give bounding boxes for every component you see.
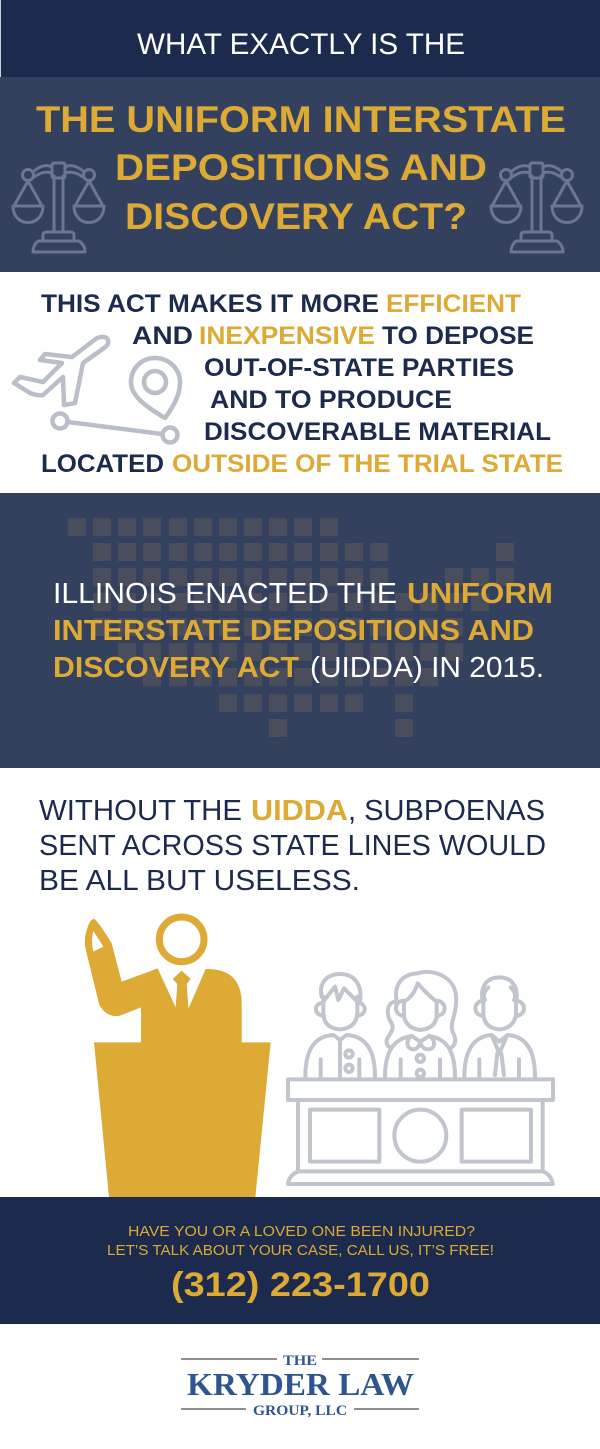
text: act description: OUTSIDE OF THE TRIAL STATE xyxy=(172,450,563,478)
text: illinois enacted statement: INTERSTATE DEPOSITIONS AND xyxy=(53,615,534,647)
title: THE UNIFORM INTERSTATE xyxy=(36,99,566,140)
text: illinois enacted statement: DISCOVERY ACT xyxy=(53,652,299,684)
text: act description: AND xyxy=(132,322,193,350)
logo: the kryder law group: GROUP, LLC xyxy=(253,1403,347,1419)
text: without the uidda: , SUBPOENAS xyxy=(348,795,545,827)
juror: middle woman xyxy=(385,972,456,1077)
text: act description: EFFICIENT xyxy=(386,290,521,318)
text: without the uidda: SENT ACROSS STATE LINES WOULD xyxy=(39,830,546,862)
map: pixel map of the United States xyxy=(68,518,514,737)
icon: airplane and map pin route xyxy=(14,337,180,442)
icon: right scales of justice xyxy=(491,163,582,252)
text: illinois enacted statement: ILLINOIS ENACTED THE xyxy=(53,578,397,610)
text: without the uidda: BE ALL BUT USELESS. xyxy=(39,865,360,897)
text: act description: THIS ACT MAKES IT MORE xyxy=(41,290,379,318)
panel: call to action footer: LET’S TALK ABOUT YOUR CASE, CALL US, IT’S FREE! xyxy=(107,1243,494,1259)
jury bench xyxy=(288,1079,553,1184)
panel: act explanation xyxy=(0,272,600,493)
text: phone number: (312) 223-1700 xyxy=(171,1266,430,1304)
text: without the uidda: UIDDA xyxy=(251,795,348,827)
text: act description: DISCOVERABLE MATERIAL xyxy=(204,418,551,446)
text: act description: OUT-OF-STATE PARTIES xyxy=(204,354,514,382)
text: illinois enacted statement: (UIDDA) IN 2015. xyxy=(310,652,544,684)
panel: top heading band xyxy=(0,0,600,77)
icon: lawyer at podium xyxy=(85,917,271,1197)
text: without the uidda: WITHOUT THE xyxy=(39,795,242,827)
logo: the kryder law group: KRYDER LAW xyxy=(187,1366,414,1402)
title xyxy=(36,99,566,237)
text: call to action: HAVE YOU OR A LOVED ONE BEEN INJURED? xyxy=(128,1224,475,1240)
text: illinois enacted statement xyxy=(53,578,553,684)
text: act description xyxy=(41,290,563,478)
juror: right man xyxy=(464,977,535,1077)
title: DISCOVERY ACT? xyxy=(125,196,467,237)
icon: jury at bench xyxy=(288,972,553,1184)
text: act description: TO DEPOSE xyxy=(382,322,534,350)
text: act description: INEXPENSIVE xyxy=(199,322,375,350)
icon: left scales of justice xyxy=(13,163,104,252)
text: act description: AND TO PRODUCE xyxy=(210,386,452,414)
panel: act title xyxy=(0,77,600,272)
text: act description: LOCATED xyxy=(41,450,164,478)
title: DEPOSITIONS AND xyxy=(115,147,487,188)
juror: left man xyxy=(305,974,375,1077)
logo: the kryder law group: THE xyxy=(283,1353,317,1369)
text: illinois enacted statement: UNIFORM xyxy=(407,578,553,610)
text: without the uidda xyxy=(39,795,546,897)
heading: what exactly is the: WHAT EXACTLY IS THE xyxy=(137,28,465,61)
panel: call to action footer xyxy=(0,1197,600,1324)
logo: the kryder law group xyxy=(181,1353,419,1419)
panel: illinois enactment xyxy=(0,493,600,768)
